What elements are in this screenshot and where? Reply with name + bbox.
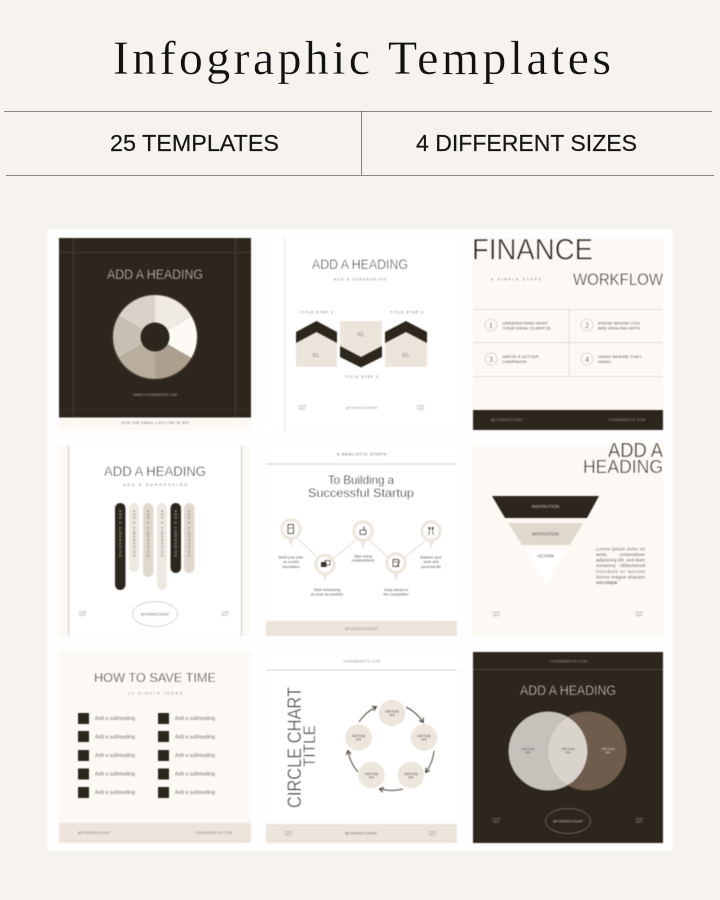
body text: nibh: [620, 563, 629, 568]
step labels: collaborations: [352, 558, 375, 562]
step labels: on a solid: [283, 560, 299, 564]
footer labels: [78, 610, 229, 617]
cycle chart: Add body: [385, 710, 399, 714]
step 4: [581, 353, 642, 365]
checklist: Add a subheading: [175, 790, 215, 796]
account badge: @YOURACCOUNT: [141, 612, 169, 616]
venn diagram: Add body: [521, 747, 535, 751]
pill chart: ADD A SUBHEADING: [132, 510, 136, 558]
website text: YOURWEBSITE.COM: [550, 660, 587, 664]
step labels: the competition: [383, 592, 409, 596]
connector lines: [297, 538, 425, 558]
step labels: Start networking: [314, 588, 340, 592]
footer text: JOIN THE EMAIL LIST/LINK IN BIO: [121, 421, 189, 425]
body text: erat volutpat.: [596, 580, 618, 585]
rotated title: TITLE: [301, 725, 319, 767]
footer bar: [473, 410, 663, 430]
subheading: ADD A SUBHEADING: [334, 278, 386, 282]
venn diagram: Add body: [601, 747, 615, 751]
donut chart: [112, 294, 198, 380]
checklist: Add a subheading: [175, 772, 215, 778]
heading: workflow: WORKFLOW: [573, 271, 663, 289]
step 3: 3: [489, 355, 493, 364]
funnel chart: ACTION: [537, 554, 554, 558]
panel: pill columns template: [59, 445, 250, 636]
account badge: [132, 602, 178, 626]
heading: ADD A HEADING: [107, 267, 203, 282]
footer bar: YOURWEBSITE.COM: [195, 831, 232, 835]
footer labels: YOUR: [635, 817, 643, 821]
step labels: Start doing: [354, 554, 372, 558]
subheading: ADD A SUBHEADING: [123, 483, 187, 487]
heading: ADD A: [608, 440, 664, 462]
footer labels: TEXT: [221, 613, 228, 617]
footer bar: [266, 621, 457, 636]
footer bar: YOURWEBSITE.COM: [608, 418, 645, 422]
footer labels: YOUR: [492, 817, 500, 821]
body text: consectetuer: [619, 552, 646, 557]
body text: euismod: [628, 563, 645, 568]
rotated title: [284, 687, 319, 808]
heading: Successful Startup: [308, 486, 414, 500]
step 2: 02.: [357, 332, 365, 338]
account badge: [546, 808, 590, 834]
body text: amet,: [596, 552, 607, 557]
panel: circle chart template: [266, 652, 457, 843]
footer labels: YOUR: [635, 610, 643, 614]
subheading: 10 SIMPLE IDEAS: [128, 692, 183, 696]
step labels: personal life: [421, 565, 441, 569]
footer labels: TEXT: [492, 614, 500, 618]
step 4: 4: [585, 355, 589, 364]
website text: YOURWEBSITE.COM: [343, 660, 380, 664]
checklist: Add a subheading: [95, 772, 135, 778]
footer labels: @YOURACCOUNT: [346, 406, 378, 410]
heading: ADD A HEADING: [312, 257, 408, 272]
checklist: Add a subheading: [95, 753, 135, 759]
step labels: work and: [424, 560, 438, 564]
footer bar: @YOURACCOUNT: [78, 831, 110, 835]
step 1: 01.: [313, 353, 321, 359]
pill chart: ADD A SUBHEADING: [187, 510, 191, 558]
checklist: Add a subheading: [95, 734, 135, 740]
cycle chart: text: [369, 776, 374, 780]
step 2: 2: [585, 321, 589, 330]
step 2: [340, 321, 382, 379]
step pin 2: [316, 555, 334, 582]
footer labels: TEXT: [417, 407, 424, 411]
pill chart: ADD A SUBHEADING: [146, 510, 150, 558]
step 2: KNOW WHOM YOU: [598, 320, 640, 326]
subheading: A SIMPLE STEPS: [491, 278, 542, 282]
footer labels: TEXT: [492, 820, 500, 824]
pill chart: ADD A SUBHEADING: [174, 510, 178, 558]
top label: 5 REALISTIC STEPS: [337, 452, 386, 456]
venn diagram: [508, 712, 626, 790]
checklist: Add a subheading: [175, 734, 215, 740]
step 4: HANG WHERE THEY: [598, 354, 642, 359]
body text: Lorem ipsum dolor sit: [596, 546, 646, 552]
body text: [596, 546, 646, 585]
footer bar: TEXT: [428, 833, 436, 837]
checklist: Add a subheading: [95, 790, 135, 796]
cycle chart: Add body: [365, 772, 379, 776]
step pin 3: [354, 522, 372, 549]
footer labels: YOUR: [221, 610, 229, 614]
heading: To Building a: [328, 473, 394, 487]
heading: [584, 442, 664, 474]
step 3: CAMPAIGN: [502, 359, 527, 364]
panel: donut template: [59, 238, 251, 430]
step labels: Build your plan: [279, 556, 303, 560]
step pin 4: [387, 554, 405, 581]
footer labels: TEXT: [79, 613, 86, 617]
footer bar: @YOURACCOUNT: [491, 418, 523, 422]
step 3: [385, 310, 427, 367]
footer bar: [59, 823, 251, 843]
footer labels: YOUR: [78, 610, 87, 614]
heading: ADD A HEADING: [104, 464, 206, 479]
step 2: [581, 319, 641, 331]
step 1: 1: [489, 321, 493, 330]
step 1: YOUR IDEAL CLIENT IS.: [502, 326, 552, 330]
step 3: 03.: [402, 353, 410, 359]
step 1: [296, 310, 337, 367]
footer labels: [298, 404, 424, 411]
rotated title: CIRCLE CHART: [284, 687, 306, 808]
cycle chart: Add body: [417, 734, 431, 738]
funnel chart: MOTIVATION: [532, 532, 559, 536]
heading: ADD A HEADING: [520, 683, 616, 698]
venn diagram: text: [565, 750, 571, 754]
footer labels: TEXT: [298, 407, 305, 411]
heading: HOW TO SAVE TIME: [94, 670, 216, 685]
footer bar: [266, 824, 457, 843]
step pin 1: [282, 520, 300, 547]
panel: startup steps template: [266, 445, 457, 636]
body text: nonummy: [596, 563, 617, 568]
step 2: TITLE STEP 2: [345, 375, 378, 379]
heading: finance: FINANCE: [472, 234, 593, 266]
checklist: Add a subheading: [175, 753, 215, 759]
checklist: Add a subheading: [95, 716, 135, 722]
footer bar: YOUR: [284, 830, 292, 834]
step 1: UNDERSTAND WHO: [502, 320, 548, 326]
footer labels: [492, 611, 644, 617]
pill chart: ADD A SUBHEADING: [118, 510, 122, 558]
stat: template count: 25 TEMPLATES: [110, 130, 279, 156]
panel: chevron steps template: [266, 238, 457, 430]
heading: HEADING: [583, 457, 663, 477]
stat: sizes: 4 DIFFERENT SIZES: [416, 130, 637, 156]
body text: tincidunt ut laoreet: [596, 569, 646, 574]
step 3: TITLE STEP 3: [390, 310, 423, 314]
cycle chart: Add body: [404, 772, 418, 776]
panel: template gallery: [47, 229, 673, 851]
step labels: as soon as possible: [311, 592, 343, 596]
cycle chart: text: [408, 776, 414, 780]
panel: finance workflow template: [472, 234, 663, 430]
body text: dolore magna aliquam: [596, 574, 645, 580]
step pin 5: [422, 522, 440, 549]
footer labels: TEXT: [636, 820, 643, 824]
checklist: Add a subheading: [175, 716, 215, 722]
step 1: TITLE STEP 1: [300, 310, 333, 314]
title: Infographic Templates: [113, 32, 611, 85]
step 2: ARE DEALING WITH.: [598, 326, 641, 330]
venn diagram: text: [525, 750, 531, 754]
footer bar: YOUR: [428, 830, 436, 834]
step labels: [279, 554, 443, 596]
pill chart: [115, 503, 194, 590]
footer bar: @YOURACCOUNT: [345, 627, 378, 631]
heading: [308, 473, 414, 500]
step 3: WRITE A LETTER: [502, 354, 539, 359]
pill chart: ADD A SUBHEADING: [160, 510, 164, 558]
funnel chart: INSPIRATION: [532, 504, 559, 509]
footer labels: YOUR: [492, 610, 500, 614]
footer bar: @YOURACCOUNT: [345, 832, 377, 836]
website text: WWW.YOURWEBSITE.COM: [133, 393, 177, 397]
checklist: [78, 713, 215, 798]
funnel chart: [492, 496, 599, 584]
body text: adipiscing elit, sed diam: [596, 558, 645, 562]
account badge: @YOURACCOUNT: [553, 820, 583, 824]
panel: checklist template: [59, 652, 251, 843]
cycle chart: text: [421, 738, 427, 742]
venn diagram: Add body: [561, 747, 575, 751]
step labels: foundation: [282, 565, 300, 569]
footer labels: TEXT: [636, 614, 643, 618]
panel: funnel template: [473, 440, 664, 636]
step labels: Balance your: [420, 556, 443, 560]
step 1: [485, 319, 552, 331]
header strip: [4, 111, 714, 176]
step labels: Keep ahead of: [384, 588, 409, 592]
cycle chart: [345, 700, 437, 791]
cycle chart: text: [356, 738, 361, 742]
step 3: [485, 353, 539, 365]
footer labels: YOUR: [416, 404, 424, 408]
panel: venn diagram template: [473, 652, 663, 843]
footer labels: [492, 817, 643, 824]
venn diagram: text: [605, 750, 611, 754]
cycle chart: text: [389, 713, 395, 717]
footer bar: TEXT: [284, 833, 292, 837]
footer labels: YOUR: [298, 404, 306, 408]
step 4: HANG.: [598, 359, 612, 364]
cycle chart: Add body: [352, 734, 366, 738]
